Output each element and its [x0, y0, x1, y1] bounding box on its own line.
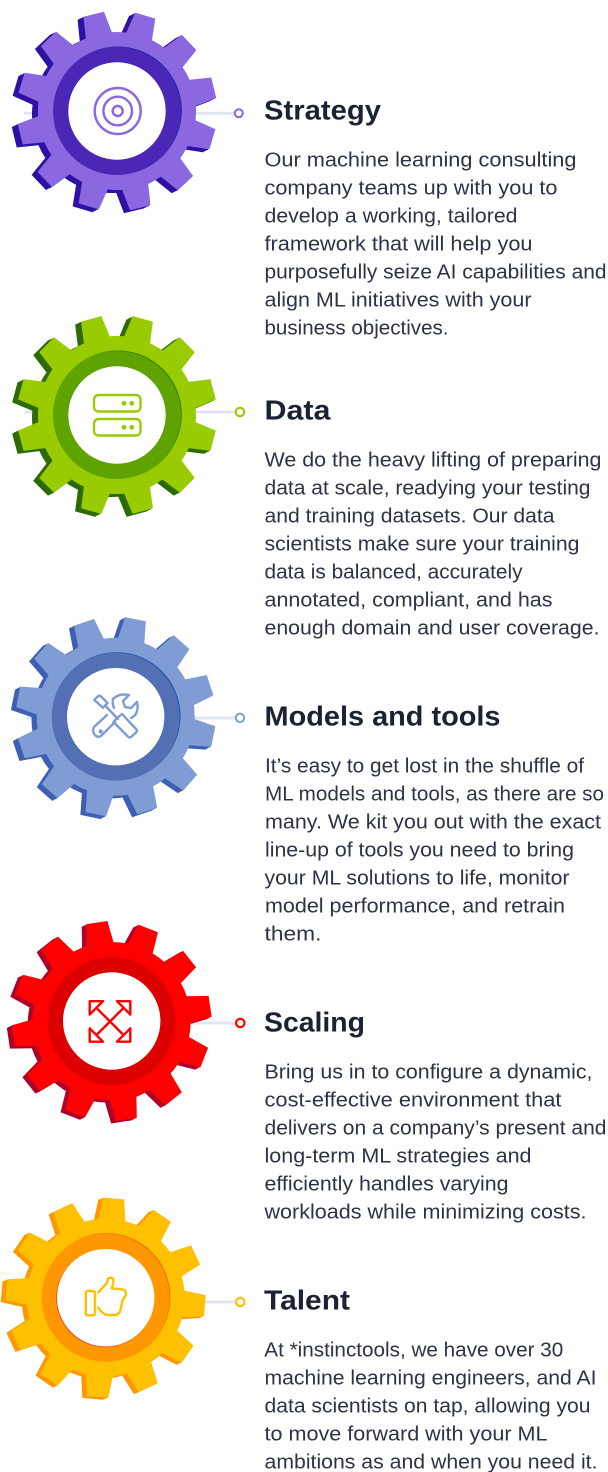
text block: Data: scientists make sure your training — [264, 534, 580, 556]
text block: Scaling: cost-effective environment that — [264, 1090, 562, 1112]
heading: Data: Data — [264, 394, 331, 426]
text block: Strategy: Our machine learning consulting — [264, 150, 576, 172]
gear: blue — [0, 599, 233, 837]
text block: Data: We do the heavy lifting of preparing — [264, 450, 602, 472]
text block: Strategy: develop a working, tailored — [264, 206, 518, 228]
text block: Talent: At *instinctools, we have over 30 — [264, 1340, 563, 1362]
text block: Scaling: delivers on a company’s present and — [264, 1118, 606, 1140]
gear: purple — [0, 0, 241, 238]
text block: Strategy: purposefully seize AI capabilities and — [264, 262, 606, 284]
text block: Models and tools: your ML solutions to life, monitor — [264, 868, 570, 890]
icon: servers — [94, 395, 140, 436]
panel: Scaling — [0, 892, 606, 1224]
text block: Data: and training datasets. Our data — [264, 506, 555, 528]
text block: Models and tools: It’s easy to get lost in the shuffle of — [265, 756, 584, 778]
text block: Scaling: workloads while minimizing costs. — [263, 1202, 586, 1224]
heading: Strategy: Strategy — [264, 94, 382, 126]
icon: target — [95, 88, 141, 134]
text block: Talent: to move forward with your ML — [264, 1424, 548, 1446]
connector dot — [236, 714, 244, 722]
text block: Models and tools — [264, 756, 604, 946]
panel: Data — [0, 293, 602, 640]
heading: Scaling: Scaling — [264, 1006, 365, 1038]
text block: Scaling: efficiently handles varying — [264, 1174, 508, 1196]
text block: Data: enough domain and user coverage. — [264, 618, 600, 640]
text block: Talent: data scientists on tap, allowing you — [264, 1396, 590, 1418]
icon: tools — [93, 694, 138, 737]
text block: Scaling — [263, 1062, 606, 1224]
panel: Models and tools — [0, 599, 604, 946]
text block: Strategy: framework that will help you — [264, 234, 532, 256]
text block: Strategy: align ML initiatives with your — [264, 290, 532, 312]
text block: Scaling: Bring us in to configure a dynamic, — [264, 1062, 592, 1084]
connector dot — [236, 1019, 244, 1027]
gear: green — [0, 293, 239, 540]
heading: Models and tools: Models and tools — [264, 700, 500, 732]
icon: expand arrows — [90, 1001, 130, 1042]
panel: Strategy — [0, 0, 607, 339]
panel: Talent — [0, 1191, 598, 1472]
text block: Strategy: business objectives. — [264, 318, 448, 340]
text block: Talent: machine learning engineers, and AI — [264, 1368, 596, 1390]
gear: yellow — [0, 1191, 213, 1407]
connector dot — [235, 109, 243, 117]
text block: Strategy: company teams up with you to — [264, 178, 558, 200]
text block: Models and tools: line-up of tools you need to bring — [265, 840, 574, 862]
text block: Models and tools: model performance, and retrain — [265, 896, 565, 918]
text block: Scaling: long-term ML strategies and — [264, 1146, 532, 1168]
text block: Data: data at scale, readying your testing — [264, 478, 590, 500]
text block: Strategy — [264, 150, 606, 340]
connector line — [150, 1022, 236, 1024]
connector line — [24, 112, 235, 115]
connector line — [26, 716, 236, 720]
heading: Talent: Talent — [264, 1284, 350, 1316]
text block: Models and tools: them. — [264, 924, 322, 946]
connector dot — [236, 408, 244, 416]
connector line — [25, 410, 236, 414]
icon: thumbs up — [86, 1278, 126, 1315]
text block: Talent — [264, 1340, 598, 1472]
connector dot — [236, 1298, 244, 1306]
text block: Models and tools: many. We kit you out with the exact — [265, 812, 601, 834]
connector line — [150, 1300, 236, 1304]
gear: red — [0, 892, 241, 1153]
text block: Data — [264, 450, 602, 640]
text block: Data: annotated, compliant, and has — [264, 590, 552, 612]
text block: Models and tools: ML models and tools, as there are so — [265, 784, 604, 806]
text block: Data: data is balanced, accurately — [264, 562, 522, 584]
